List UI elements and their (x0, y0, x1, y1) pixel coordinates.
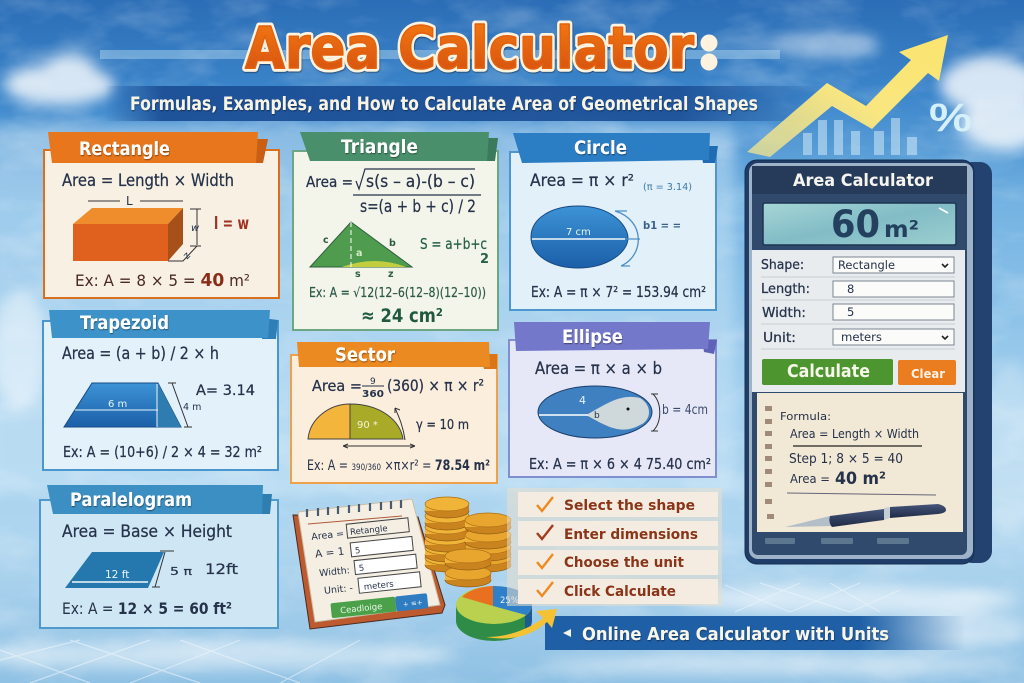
keypad slots (765, 538, 909, 544)
calculator form: Unit: (763, 330, 796, 346)
title: Area Calculator (245, 14, 694, 82)
formula: 360 (362, 389, 384, 400)
step 3 (518, 550, 718, 575)
sector diagram (308, 404, 415, 448)
banner: circle (513, 133, 718, 163)
clear button (898, 360, 956, 385)
calculator header (752, 166, 967, 194)
icon: pen (785, 504, 946, 527)
step 1: Select the shape (564, 498, 695, 514)
triangle diagram: a (356, 248, 362, 259)
title: Area Calculator (245, 14, 694, 82)
chart arrow decoration (803, 96, 972, 155)
formula: Area = π × a × b (535, 359, 662, 378)
icon: coin stacks (425, 497, 511, 587)
calculate button: Calculate (787, 362, 870, 382)
calculator display: 60 (831, 203, 880, 246)
example: Ex: A = √12(12–6(12–8)(12–10)) (309, 286, 486, 301)
formula note (757, 393, 963, 532)
formula note: Area = (790, 471, 830, 486)
notebook illustration: meters (363, 580, 395, 593)
calculator form: meters (841, 330, 882, 344)
formula: Area = π × r² (530, 171, 634, 190)
semi-perimeter note: S = a+b+c (420, 235, 487, 253)
panel: triangle (293, 132, 498, 330)
panel: sector (291, 342, 497, 483)
label b1: b1 = = (643, 219, 681, 232)
label l = w: l = w (214, 214, 249, 234)
box diagram: L (126, 194, 133, 208)
banner: sector: Sector (335, 344, 396, 366)
example: Ex: A = (10+6) / 2 × 4 = 32 m² (63, 443, 262, 461)
calculator form: 8 (847, 282, 854, 296)
formula note: Formula: (780, 410, 831, 423)
formula: Area = (a + b) / 2 × h (62, 344, 219, 364)
example: Ex: A = 390/360 ×π×r² = 78.54 m² (307, 458, 490, 474)
triangle diagram: b (389, 238, 396, 249)
triangle diagram: s (355, 269, 361, 280)
pie chart (456, 586, 532, 641)
box diagram: w (191, 223, 200, 234)
formula note: Area = Length × Width (790, 426, 919, 441)
banner: trapezoid (49, 310, 278, 339)
trapezoid diagram: 4 m (183, 402, 201, 413)
step 3: Choose the unit (564, 555, 684, 571)
formula note: Step 1; 8 × 5 = 40 (789, 451, 903, 467)
trapezoid diagram (64, 383, 201, 427)
notebook illustration: Area = (311, 529, 345, 543)
notebook illustration: Ceadloige (340, 602, 383, 616)
label b: b = 4cm (662, 403, 708, 418)
banner: rectangle (48, 132, 268, 163)
circle diagram: 7 cm (566, 227, 591, 238)
banner: circle: Circle (574, 137, 627, 159)
calculator display (763, 203, 956, 246)
pi note: (π = 3.14) (643, 182, 692, 193)
calculate button (762, 359, 893, 385)
semi-perimeter note: 2 (480, 252, 489, 267)
banner: trapezoid: Trapezoid (80, 312, 169, 334)
notebook illustration: 5 (355, 546, 361, 556)
calculator body (745, 160, 992, 564)
ellipse diagram: 4 (579, 394, 586, 407)
panel: ellipse (509, 322, 717, 477)
formula: Area = (312, 377, 362, 395)
step 2 (518, 521, 718, 546)
icon: rising arrow (747, 35, 948, 157)
formula (312, 376, 484, 400)
semi-perimeter note (420, 235, 489, 267)
example: Ex: A = π × 6 × 4 75.40 cm² (529, 455, 711, 473)
parallelogram diagram: 5 π (170, 565, 192, 578)
notebook illustration: Width: (319, 565, 350, 579)
calculator (745, 160, 992, 564)
subtitle: Formulas, Examples, and How to Calculate Area of Geometrical Shapes (130, 93, 758, 115)
calculator form (752, 250, 965, 392)
formula: s(s – a)-(b – c) (366, 172, 475, 192)
parallelogram diagram: 12 ft (105, 569, 129, 581)
banner: triangle (300, 132, 498, 161)
checklist (507, 488, 722, 606)
footer banner: Online Area Calculator with Units (582, 624, 889, 645)
notebook illustration: Unit: - (324, 583, 354, 597)
triangle diagram (310, 222, 412, 280)
radius label: γ = 10 m (416, 417, 469, 433)
calculator form: Width: (762, 305, 806, 321)
parallelogram diagram (65, 551, 239, 588)
notebook illustration: A = 1 (315, 546, 345, 561)
subtitle band (105, 86, 825, 121)
panel: rectangle (44, 132, 279, 298)
calculator form: Length: (761, 281, 810, 297)
clear button: Clear (911, 367, 945, 381)
notebook illustration: + ≡+ (402, 599, 423, 609)
notebook illustration: Retangle (350, 524, 388, 538)
calculator form: Rectangle (838, 258, 895, 272)
example: Ex: A = π × 7² = 153.94 cm² (531, 283, 706, 301)
formula note: 40 m² (835, 469, 886, 489)
banner: rectangle: Rectangle (79, 138, 170, 160)
step 2: Enter dimensions (564, 527, 698, 543)
bars (803, 118, 917, 155)
banner: sector (297, 342, 497, 369)
percent sign: % (929, 96, 972, 140)
banner: parallelogram: Paralelogram (70, 489, 192, 511)
box diagram (73, 194, 201, 262)
ellipse diagram: b (594, 411, 600, 421)
calculator form: Shape: (761, 257, 804, 273)
step 4 (518, 579, 718, 604)
formula: Area = (306, 173, 353, 191)
calculator display: m² (884, 217, 919, 243)
arrow: pie to footer (486, 609, 557, 638)
formula: Area = Length × Width (62, 171, 234, 191)
footer banner (545, 616, 965, 650)
ellipse diagram (538, 386, 660, 438)
parallelogram diagram: 12ft (205, 562, 239, 578)
formula: 9 (370, 377, 376, 387)
result: ≈ 24 cm² (361, 305, 443, 327)
note A = 3.14: A= 3.14 (196, 383, 255, 399)
panel: circle (510, 133, 718, 310)
example: Ex: A = 8 × 5 = 40 m² (75, 270, 250, 291)
formula (306, 169, 481, 217)
step 1 (518, 492, 718, 517)
notebook illustration (293, 499, 445, 629)
circle diagram (531, 206, 640, 268)
sector diagram: 90 * (357, 420, 378, 431)
box diagram: z (181, 250, 193, 262)
pie chart: 25% (500, 596, 519, 606)
notebook illustration: 5 (358, 564, 365, 574)
example: Ex: A = 12 × 5 = 60 ft² (62, 599, 232, 618)
panel: trapezoid (43, 310, 278, 470)
calculator header: Area Calculator (793, 171, 934, 191)
formula: (360) × π × r² (387, 376, 484, 395)
step 4: Click Calculate (564, 584, 676, 600)
triangle diagram: z (388, 269, 394, 280)
formula: Area = Base × Height (62, 522, 232, 542)
panel: parallelogram (40, 485, 278, 628)
banner: parallelogram (47, 485, 272, 514)
trapezoid diagram: 6 m (108, 399, 127, 410)
calculator form: 5 (847, 305, 854, 319)
triangle diagram: c (323, 235, 329, 246)
banner: triangle: Triangle (341, 136, 418, 158)
banner: ellipse (514, 322, 717, 354)
banner: ellipse: Ellipse (562, 326, 623, 348)
formula: s=(a + b + c) / 2 (360, 197, 476, 217)
